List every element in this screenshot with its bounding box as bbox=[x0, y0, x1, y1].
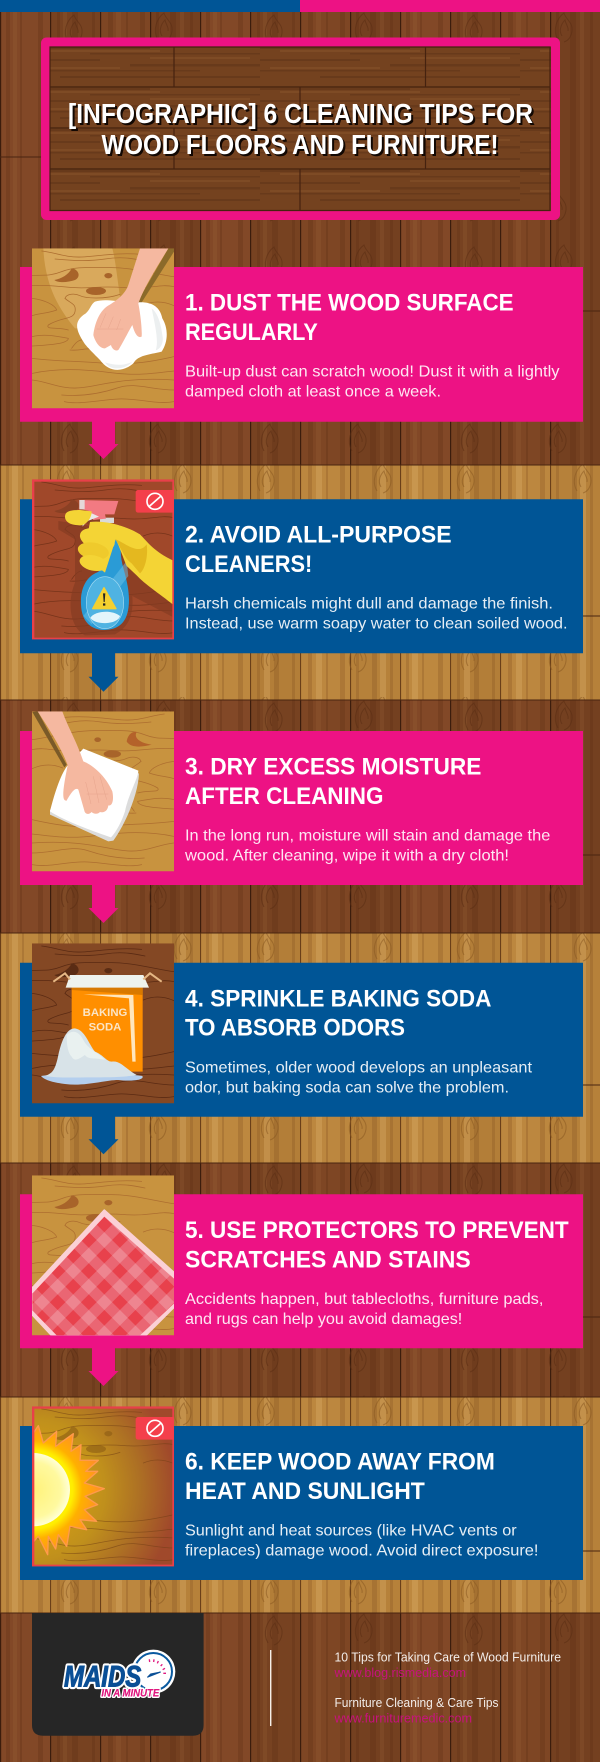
image: sun heating wood bbox=[32, 1406, 174, 1566]
heading bbox=[185, 1217, 569, 1273]
source links: www.furnituremedic.com bbox=[334, 1710, 472, 1725]
logo: Maids in a Minute: MAIDS bbox=[64, 1660, 142, 1693]
body text: damped cloth at least once a week. bbox=[185, 384, 441, 401]
panel: tip 6 bbox=[0, 1406, 583, 1580]
image: baking soda box and powder pile: BAKING bbox=[83, 1007, 128, 1019]
image: baking soda box and powder pile: SODA bbox=[89, 1022, 121, 1034]
logo: Maids in a Minute: IN A MINUTE bbox=[101, 1688, 160, 1700]
body text bbox=[184, 828, 551, 865]
body text: Accidents happen, but tablecloths, furniture pads, bbox=[185, 1291, 543, 1308]
heading: SCRATCHES AND STAINS bbox=[185, 1246, 471, 1273]
source links: www.blog.rismedia.com bbox=[334, 1665, 466, 1680]
heading: REGULARLY bbox=[185, 319, 318, 346]
panel: tip 2 bbox=[20, 479, 583, 692]
panel: tip 4 bbox=[20, 943, 583, 1154]
image: baking soda box and powder pile bbox=[32, 943, 174, 1103]
body text bbox=[185, 1523, 538, 1560]
logo: Maids in a Minute bbox=[64, 1650, 175, 1700]
heading: TO ABSORB ODORS bbox=[185, 1015, 405, 1042]
title text: WOOD FLOORS AND FURNITURE! bbox=[102, 129, 498, 160]
body text: wood. After cleaning, wipe it with a dry cloth! bbox=[184, 848, 509, 865]
body text: and rugs can help you avoid damages! bbox=[185, 1311, 462, 1328]
image: hand dusting wood with cloth bbox=[32, 248, 174, 408]
heading bbox=[185, 754, 481, 810]
body text bbox=[185, 364, 560, 401]
body text: odor, but baking soda can solve the problem. bbox=[185, 1079, 509, 1096]
source links: Furniture Cleaning & Care Tips bbox=[334, 1695, 499, 1710]
title text: [INFOGRAPHIC] 6 CLEANING TIPS FOR bbox=[68, 98, 533, 129]
footer divider bbox=[270, 1650, 271, 1726]
heading: 3. DRY EXCESS MOISTURE bbox=[185, 754, 481, 781]
heading: HEAT AND SUNLIGHT bbox=[185, 1478, 425, 1505]
heading: CLEANERS! bbox=[185, 551, 312, 578]
body text: Instead, use warm soapy water to clean soiled wood. bbox=[185, 616, 568, 633]
heading bbox=[185, 522, 452, 578]
body text bbox=[185, 596, 568, 633]
logo panel bbox=[32, 1613, 204, 1736]
heading: AFTER CLEANING bbox=[185, 783, 384, 810]
body text: Built-up dust can scratch wood! Dust it with a lightly bbox=[185, 364, 560, 381]
top color bar bbox=[0, 0, 600, 12]
logo: Maids in a Minute: MAIDS bbox=[64, 1660, 142, 1693]
body text: In the long run, moisture will stain and damage the bbox=[185, 828, 551, 845]
heading: 4. SPRINKLE BAKING SODA bbox=[185, 985, 492, 1012]
image: checkered tablecloth on wood bbox=[32, 1175, 174, 1335]
panel: tip 3 bbox=[20, 711, 583, 923]
body text bbox=[185, 1059, 533, 1096]
heading: 1. DUST THE WOOD SURFACE bbox=[185, 290, 514, 317]
panel: tip 5 bbox=[20, 1175, 583, 1386]
source links: 10 Tips for Taking Care of Wood Furniture bbox=[334, 1650, 561, 1665]
heading bbox=[185, 290, 514, 346]
source links bbox=[334, 1650, 561, 1725]
image: gloved hand with spray bottle bbox=[32, 479, 174, 639]
heading bbox=[185, 985, 492, 1042]
heading: 2. AVOID ALL-PURPOSE bbox=[185, 522, 452, 549]
title panel bbox=[46, 42, 556, 216]
logo: Maids in a Minute: IN A MINUTE bbox=[101, 1688, 160, 1700]
title text bbox=[68, 98, 533, 160]
image: hand wiping with dry towel bbox=[32, 711, 174, 871]
panel: tip 1 bbox=[20, 248, 583, 459]
body text bbox=[185, 1291, 543, 1328]
body text: Harsh chemicals might dull and damage the finish. bbox=[185, 596, 553, 613]
body text: fireplaces) damage wood. Avoid direct exposure! bbox=[185, 1543, 538, 1560]
body text: Sometimes, older wood develops an unpleasant bbox=[185, 1059, 533, 1076]
heading: 6. KEEP WOOD AWAY FROM bbox=[185, 1449, 495, 1476]
heading: 5. USE PROTECTORS TO PREVENT bbox=[185, 1217, 569, 1244]
heading bbox=[185, 1449, 495, 1505]
body text: Sunlight and heat sources (like HVAC vents or bbox=[185, 1523, 517, 1540]
